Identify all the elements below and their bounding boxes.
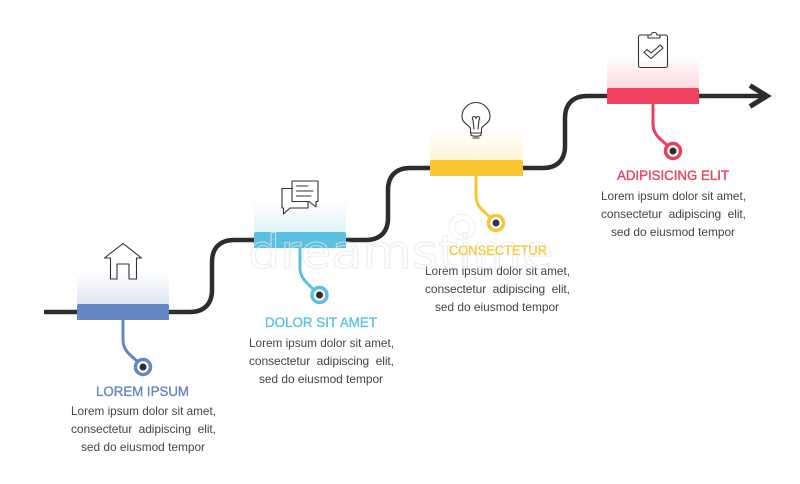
step 1 description: sed do eiusmod tempor [81, 440, 205, 454]
step 4 description [601, 189, 746, 239]
icon: house [104, 244, 142, 279]
step 2: dolor sit amet [249, 181, 394, 386]
watermark: dreamstime [248, 225, 553, 279]
step 4 description: consectetur adipiscing elit, [601, 207, 746, 221]
step 4 description: sed do eiusmod tempor [611, 225, 735, 239]
step 4 heading: ADIPISICING ELIT [617, 168, 729, 183]
step 1 connector and marker [123, 320, 150, 374]
step 4: adipisicing elit [601, 32, 746, 239]
step 2 description [249, 336, 394, 386]
step 1 bar [77, 304, 169, 320]
step 3 bar [430, 160, 523, 176]
step 1 description: Lorem ipsum dolor sit amet, [71, 404, 216, 418]
step 3 connector and marker [476, 176, 504, 230]
step 4 gradient panel [607, 56, 699, 89]
step 3 description [425, 264, 570, 314]
step 1 heading: LOREM IPSUM [96, 384, 189, 399]
stepped line with arrow [44, 86, 767, 312]
step 3: consectetur [425, 103, 570, 314]
step 2 description: Lorem ipsum dolor sit amet, [249, 336, 394, 350]
step 3 heading: CONSECTETUR [449, 243, 547, 258]
step 4 connector and marker [653, 104, 680, 158]
step 2 connector and marker [300, 248, 327, 302]
icon: clipboard [638, 32, 668, 68]
step 2 description: consectetur adipiscing elit, [249, 354, 394, 368]
step 4 bar [607, 88, 699, 104]
step 2 bar [254, 232, 346, 248]
step 2 gradient panel [254, 200, 346, 233]
step 2 description: sed do eiusmod tempor [259, 372, 383, 386]
step 1: lorem ipsum [71, 244, 216, 454]
step 3 gradient panel [430, 128, 523, 161]
step 3 description: sed do eiusmod tempor [435, 300, 559, 314]
step 1 description [71, 404, 216, 454]
step 3 description: Lorem ipsum dolor sit amet, [425, 264, 570, 278]
step 4 description: Lorem ipsum dolor sit amet, [601, 189, 746, 203]
step 3 description: consectetur adipiscing elit, [425, 282, 570, 296]
step 2 heading: DOLOR SIT AMET [265, 315, 377, 330]
step 1 gradient panel [77, 272, 169, 305]
icon: chat bubbles [282, 181, 318, 214]
icon: light bulb [462, 103, 490, 138]
step 1 description: consectetur adipiscing elit, [71, 422, 216, 436]
